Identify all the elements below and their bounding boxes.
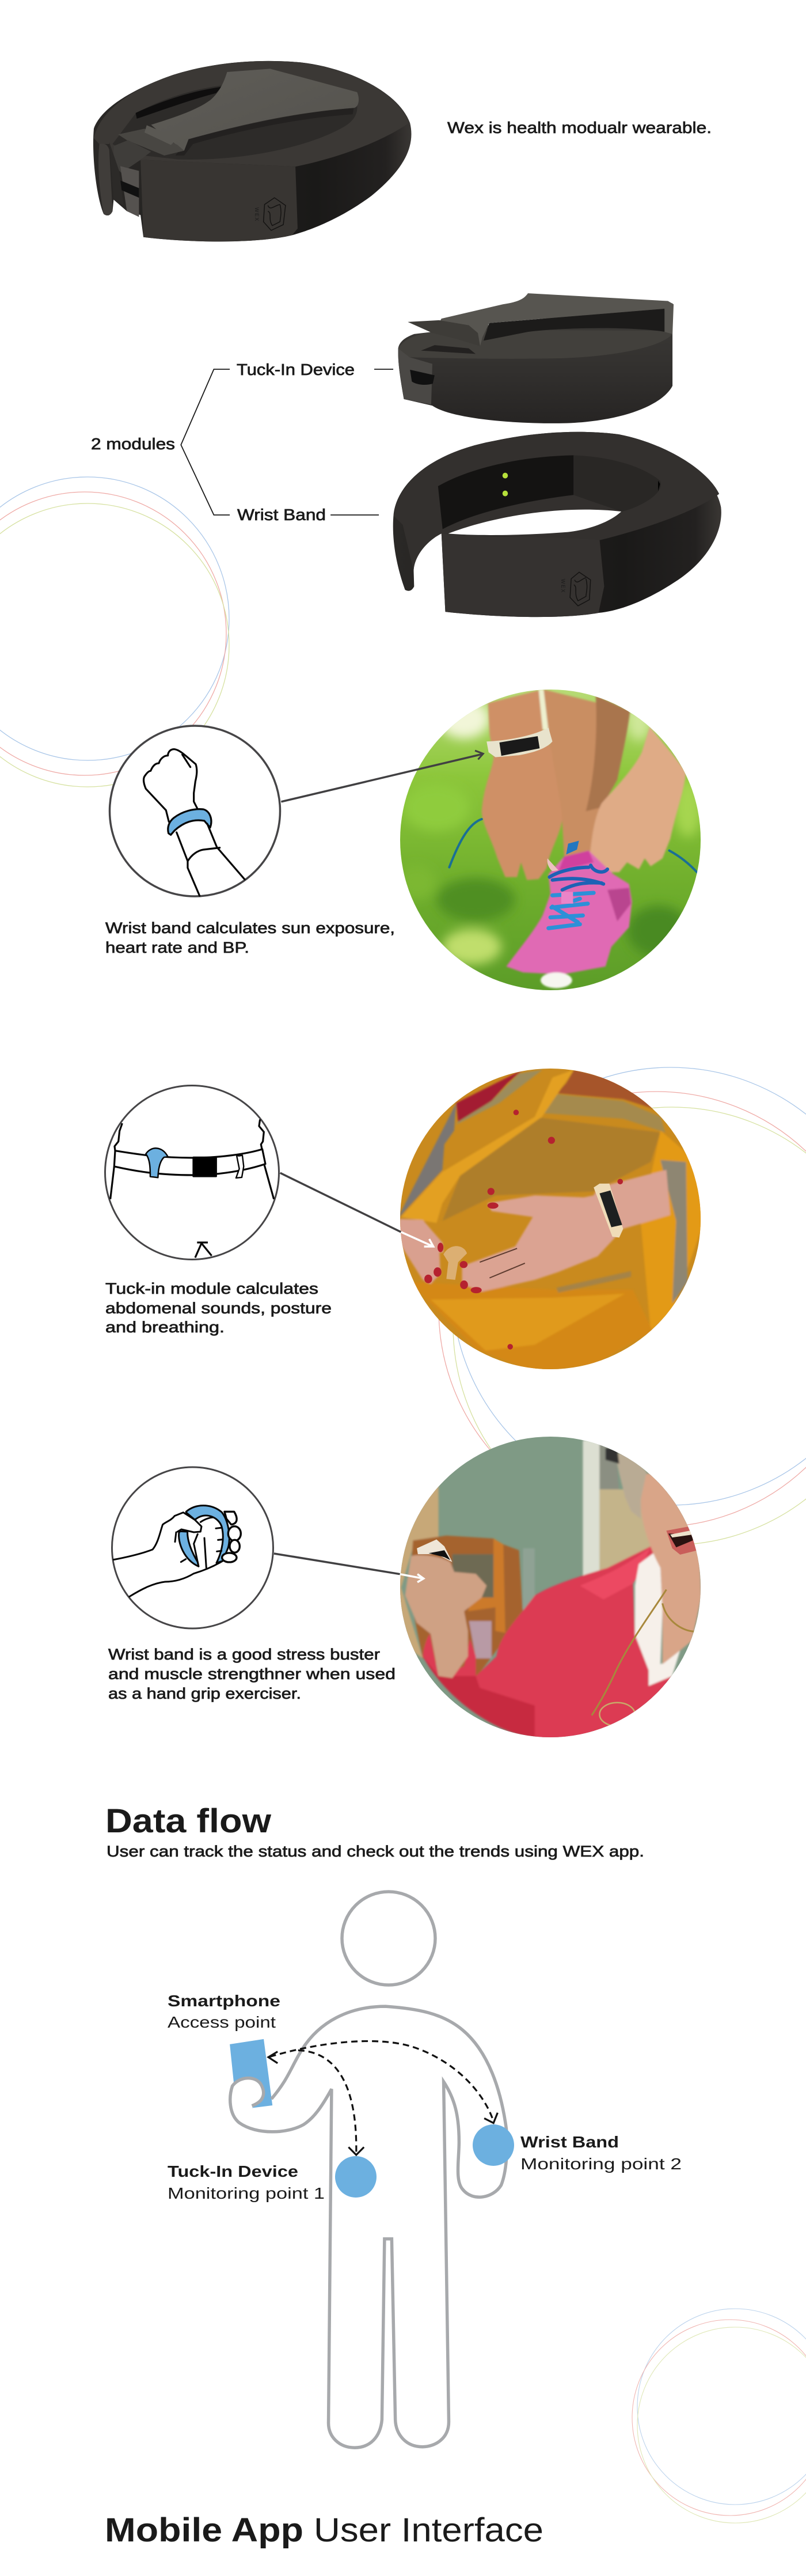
text: wrist band description: heart rate and BP. bbox=[105, 939, 249, 956]
label: smartphone: Smartphone bbox=[168, 1992, 280, 2010]
text: tuck-in description: abdomenal sounds, posture bbox=[105, 1300, 332, 1317]
icon: wrist band monitoring point bbox=[473, 2124, 514, 2166]
arrow: wrist band to photo bbox=[281, 751, 483, 802]
label: tuck-in device point: Tuck-In Device bbox=[168, 2162, 298, 2180]
text: tuck-in description: Tuck-in module calculates bbox=[105, 1280, 318, 1297]
text: tuck-in description bbox=[105, 1280, 332, 1336]
arrow: tuck-in to photo bbox=[280, 1173, 434, 1247]
arrow: hand grip to photo bbox=[274, 1554, 424, 1582]
decorative rings: middle right bbox=[439, 1067, 806, 1545]
icon: usb port bbox=[410, 370, 435, 385]
icon: wex logo band bbox=[570, 572, 591, 606]
photo: senior woman using hand grip bbox=[397, 1434, 706, 1743]
person outline body bbox=[230, 2006, 507, 2448]
label: wrist band point bbox=[520, 2133, 682, 2173]
icon: green leds bbox=[503, 473, 508, 497]
text: hand grip description: Wrist band is a good stress buster bbox=[108, 1646, 380, 1663]
text: data flow subtitle: User can track the status and check out the trends using WEX app. bbox=[107, 1843, 644, 1860]
illustration: hand grip circle bbox=[112, 1467, 273, 1628]
label: tuck-in device point: Monitoring point 1 bbox=[168, 2184, 325, 2202]
photo: woman in saree wearing tuck-in module bbox=[397, 1066, 706, 1374]
label: tuck-in device: Tuck-In Device bbox=[237, 361, 355, 378]
decorative rings: lower right bbox=[632, 2309, 806, 2523]
heading: mobile app user interface: User Interface bbox=[314, 2511, 543, 2549]
device: assembled wex wearable: WEX bbox=[254, 207, 260, 222]
device: assembled wex wearable bbox=[93, 61, 411, 241]
text: hand grip description: as a hand grip exerciser. bbox=[108, 1685, 301, 1702]
device: wrist band: WEX bbox=[560, 579, 566, 593]
text: wrist band description: Wrist band calculates sun exposure, bbox=[105, 919, 395, 937]
label: smartphone: Access point bbox=[168, 2013, 276, 2031]
icon: wex logo bbox=[264, 198, 286, 230]
device: wrist band bbox=[393, 432, 721, 617]
text: hand grip description bbox=[108, 1646, 396, 1702]
label: wrist band: Wrist Band bbox=[237, 506, 326, 524]
diagram: person data flow bbox=[230, 1892, 514, 2448]
diagram: module connector lines bbox=[181, 369, 393, 515]
illustration: wrist band circle bbox=[109, 726, 280, 896]
text: tuck-in description: and breathing. bbox=[105, 1319, 225, 1336]
icon: smartphone bbox=[230, 2039, 272, 2108]
device: tuck-in module bbox=[398, 293, 674, 423]
text: product statement: Wex is health modualr wearable. bbox=[447, 119, 712, 137]
arrows: dashed data links bbox=[268, 2041, 497, 2155]
label: smartphone bbox=[168, 1992, 280, 2031]
heading: data flow: Data flow bbox=[105, 1802, 272, 1840]
label: tuck-in device point bbox=[168, 2162, 325, 2202]
illustration: tuck-in belt circle bbox=[105, 1085, 279, 1259]
heading: mobile app user interface: Mobile App bbox=[105, 2511, 303, 2549]
heading: mobile app user interface bbox=[105, 2511, 543, 2549]
text: wrist band description bbox=[105, 919, 395, 956]
icon: tuck-in monitoring point bbox=[335, 2156, 377, 2198]
person outline head bbox=[342, 1892, 435, 1985]
decorative rings: upper left bbox=[0, 477, 229, 787]
label: wrist band point: Wrist Band bbox=[520, 2133, 619, 2151]
label: 2 modules: 2 modules bbox=[91, 435, 175, 453]
text: hand grip description: and muscle strengthner when used bbox=[108, 1665, 396, 1683]
photo: tying shoe laces with wrist band bbox=[397, 685, 706, 994]
label: wrist band point: Monitoring point 2 bbox=[520, 2155, 682, 2173]
